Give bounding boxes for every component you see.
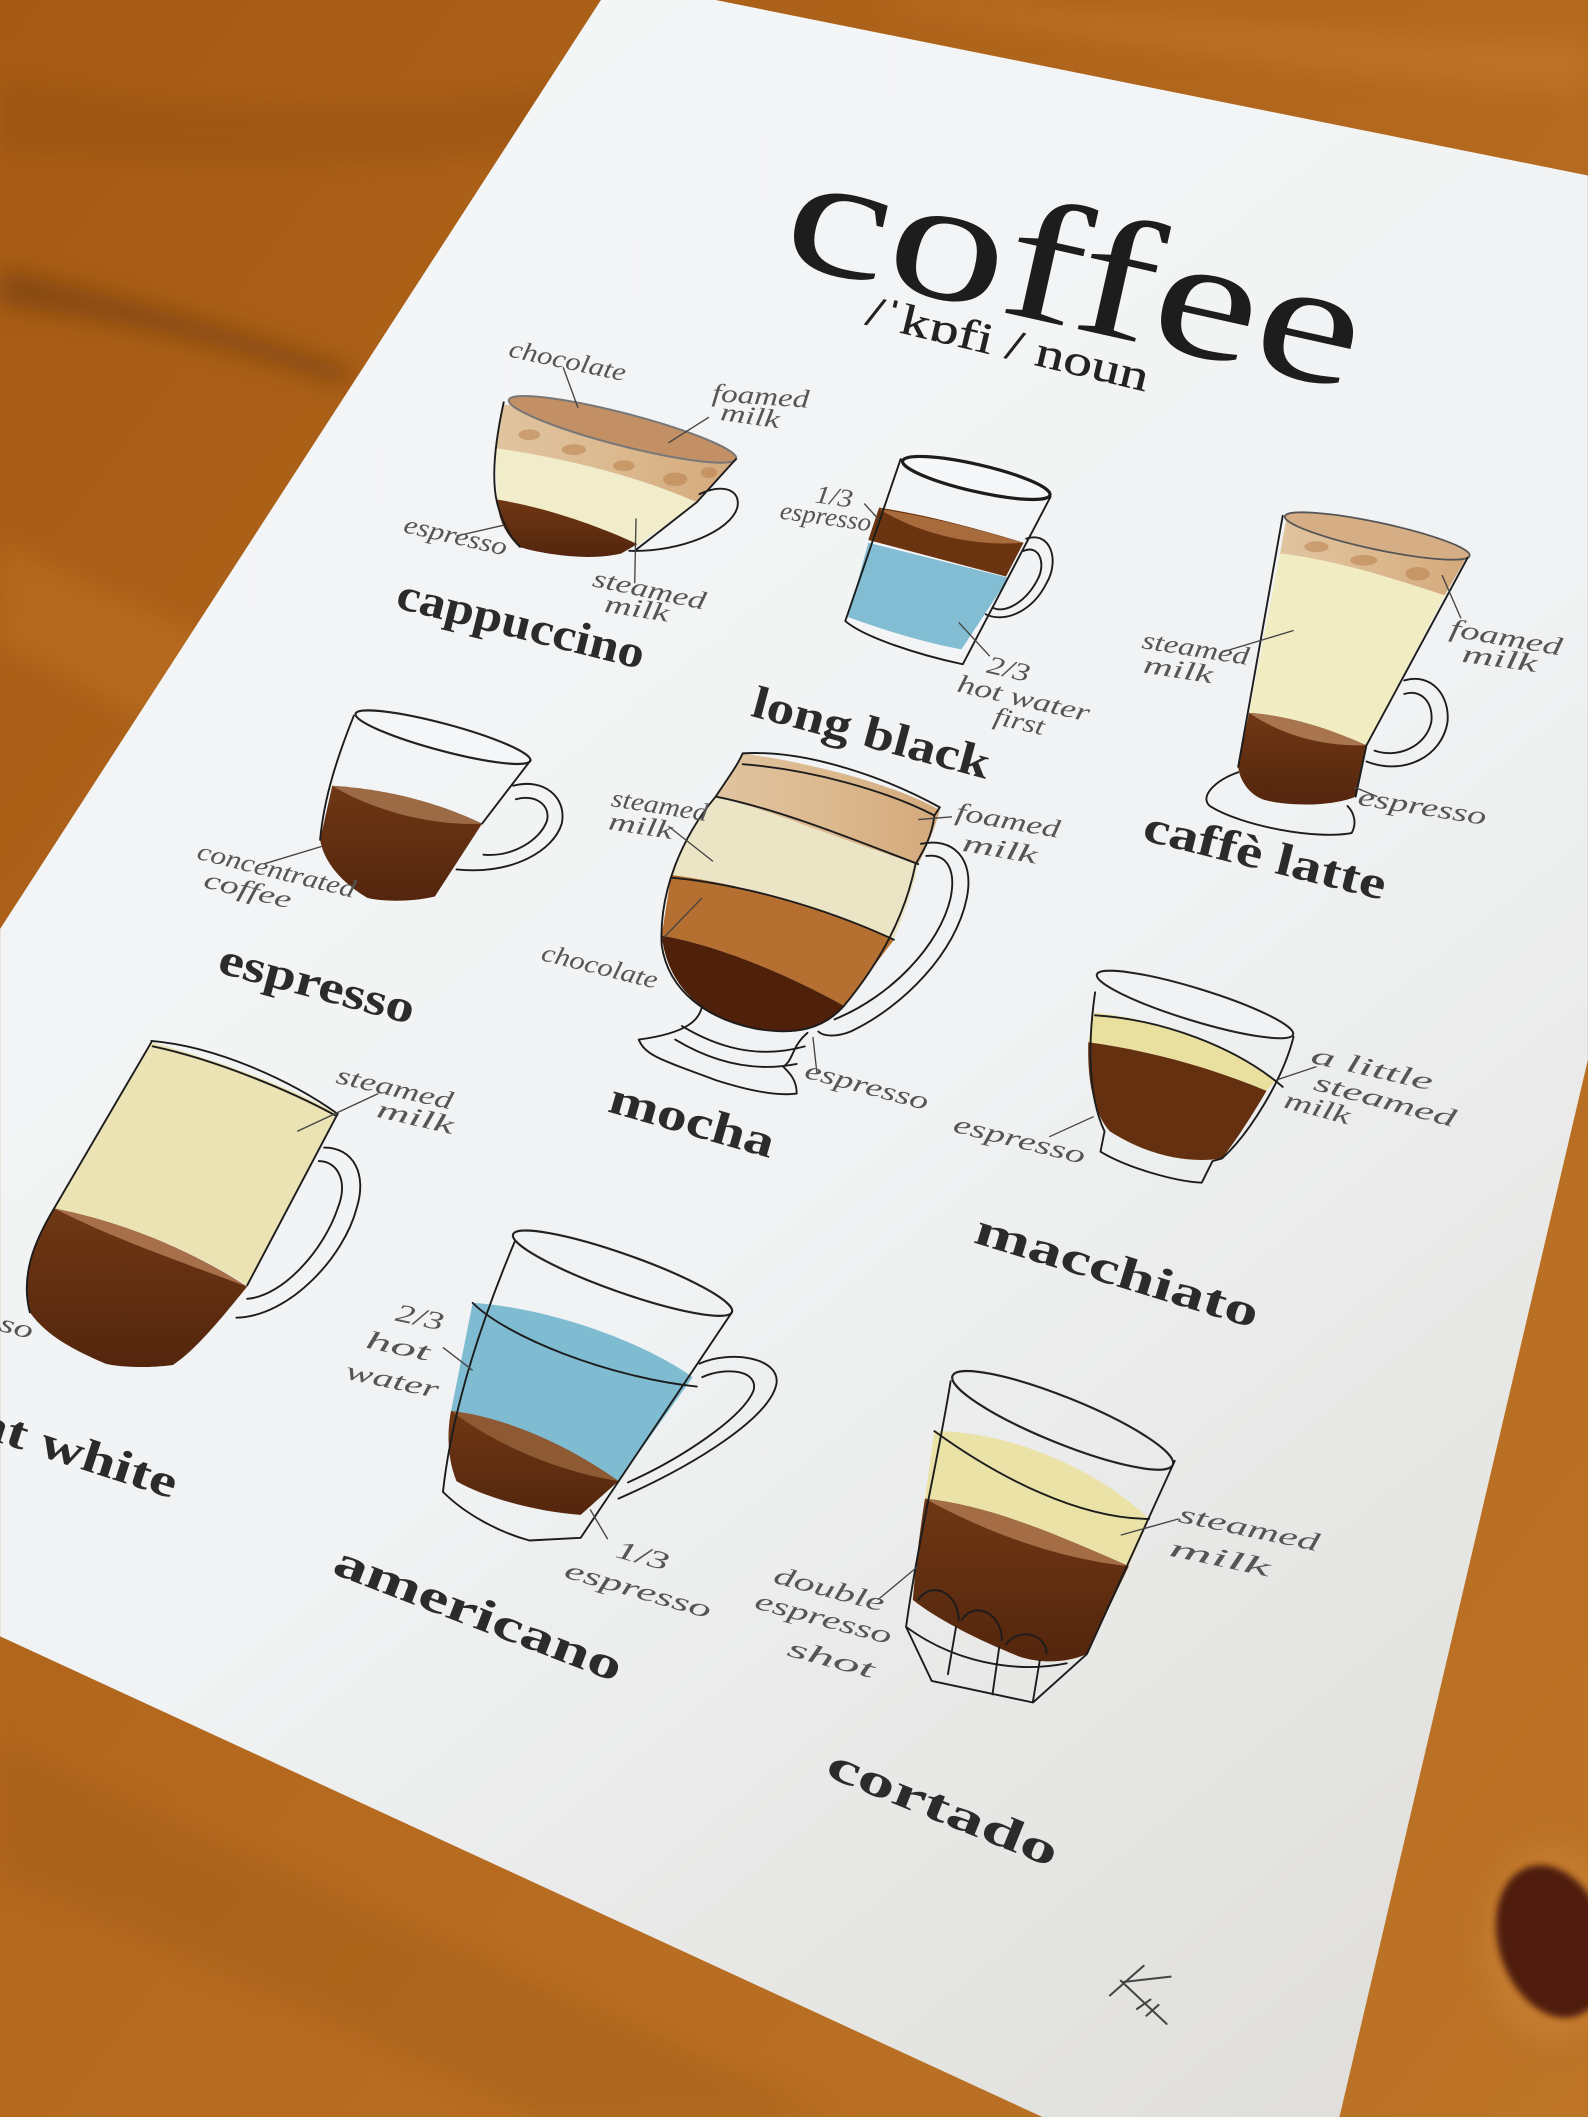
- label: double espresso shot: double: [771, 1560, 888, 1617]
- label: concentrated coffee: [194, 836, 359, 914]
- glass outline and foot: [1090, 992, 1294, 1183]
- label: steamed milk: [334, 1060, 458, 1140]
- label: a little steamed milk: a little: [1308, 1040, 1436, 1096]
- coffee layer: [320, 786, 482, 901]
- mug foot: [639, 1006, 808, 1094]
- espresso layer: [913, 1499, 1129, 1661]
- label: espresso: espresso: [802, 1055, 932, 1116]
- label: steamed milk: [590, 563, 709, 628]
- label: one third espresso: [778, 479, 873, 537]
- name: cortado: [820, 1737, 1067, 1877]
- espresso layer: [1088, 1042, 1267, 1160]
- label: steamed milk: milk: [607, 806, 676, 845]
- label: one third espresso: 1/3: [813, 479, 855, 513]
- label: foamed milk: milk: [719, 397, 783, 434]
- drink: espresso: [194, 701, 563, 1034]
- label: steamed milk: milk: [1167, 1533, 1275, 1583]
- foam speckles: [1304, 541, 1430, 581]
- leader lines: [1049, 1067, 1316, 1137]
- espresso layer: [662, 936, 844, 1031]
- label: two thirds hot water first: 2/3: [984, 650, 1033, 688]
- label: steamed milk: milk: [1141, 650, 1216, 689]
- label: espresso: espresso: [1356, 782, 1489, 831]
- cup handle and outline: [494, 402, 738, 551]
- glass outline and facets: [906, 1381, 1175, 1703]
- hot water layer: [848, 543, 1009, 649]
- name: macchiato: [969, 1203, 1266, 1338]
- label: one third espresso: 1/3: [613, 1534, 673, 1576]
- drink: cortado: [752, 1355, 1322, 1877]
- label: steamed milk: steamed: [590, 563, 709, 616]
- label: foamed milk: [711, 378, 810, 434]
- espresso layer: [497, 500, 637, 557]
- label: foamed milk: foamed: [1448, 613, 1565, 662]
- espresso layer: [1238, 713, 1366, 805]
- title: coffee: [770, 113, 1383, 427]
- espresso layer: [448, 1411, 618, 1515]
- name: mocha: [604, 1072, 781, 1168]
- leader line: [263, 847, 321, 864]
- drink: macchiato: [951, 959, 1460, 1338]
- label: steamed milk: [1167, 1499, 1322, 1583]
- leader lines: [1222, 575, 1461, 797]
- label: foamed milk: foamed: [711, 378, 810, 414]
- label: two thirds hot water: water: [343, 1356, 443, 1404]
- label: steamed milk: milk: [603, 589, 672, 628]
- label: steamed milk: steamed: [1176, 1499, 1322, 1557]
- label: double espresso shot: [752, 1560, 895, 1685]
- label: steamed milk: milk: [374, 1094, 458, 1140]
- drink: mocha: [539, 753, 1063, 1168]
- label: steamed milk: steamed: [1140, 625, 1251, 671]
- label: a little steamed milk: milk: [1281, 1085, 1355, 1131]
- chocolate layer: [662, 875, 894, 1006]
- glass rim: [1092, 959, 1298, 1050]
- name: long black: [747, 676, 997, 789]
- pronunciation: /ˈkɒfi / noun: [862, 288, 1154, 401]
- leader lines: [878, 1519, 1179, 1600]
- mug handle: [818, 843, 968, 1036]
- steamed milk layer: [54, 1042, 338, 1285]
- mug outline: [661, 753, 940, 1031]
- steamed milk layer: [925, 1431, 1149, 1566]
- foam layer: [496, 404, 736, 502]
- foam layer: [716, 753, 940, 864]
- drink: flat white: [0, 1041, 458, 1508]
- label: double espresso shot: espresso: [752, 1586, 895, 1650]
- drink: long black: [747, 448, 1094, 789]
- label: concentrated coffee: coffee: [201, 865, 295, 914]
- name: espresso: [214, 932, 421, 1034]
- artist signature: [1110, 1966, 1171, 2024]
- label: steamed milk: [1140, 625, 1251, 689]
- label: concentrated coffee: concentrated: [194, 836, 359, 904]
- steamed milk layer: [1249, 554, 1445, 745]
- label: a little steamed milk: [1281, 1040, 1460, 1133]
- label: steamed milk: steamed: [334, 1060, 456, 1115]
- glass outline and handle: [845, 459, 1053, 664]
- leader lines: [297, 1094, 378, 1131]
- name: cappuccino: [392, 568, 651, 679]
- name: americano: [327, 1535, 630, 1692]
- leader lines: [663, 817, 952, 1073]
- leader lines: [443, 1347, 608, 1539]
- steamed milk layer: [1088, 1013, 1276, 1091]
- glass rim: [944, 1355, 1181, 1486]
- drink: americano: [327, 1217, 777, 1692]
- label: chocolate: chocolate: [507, 334, 629, 387]
- label: one third espresso: espresso: [561, 1555, 715, 1624]
- leader lines: [864, 504, 990, 656]
- label: foamed milk: milk: [960, 828, 1041, 870]
- name: caffè latte: [1139, 800, 1392, 910]
- cup outline and handle: [320, 716, 563, 870]
- foam speckles: [519, 429, 717, 486]
- label: foamed milk: [954, 797, 1063, 870]
- glass body: [848, 460, 1051, 664]
- glass outline, handle and saucer: [1206, 516, 1468, 835]
- label: two thirds hot water first: first: [991, 701, 1049, 741]
- glass rim: [507, 1217, 738, 1330]
- steamed milk layer: [671, 797, 918, 945]
- cup rim: [505, 384, 740, 474]
- label: steamed milk: steamed: [609, 783, 710, 827]
- leader lines: [456, 367, 709, 583]
- steamed milk layer: [496, 448, 697, 545]
- drink: caffe latte: [1139, 503, 1565, 910]
- wood knot: [1477, 1847, 1588, 2041]
- label: one third espresso: espresso: [778, 496, 873, 537]
- glass rim: [1282, 503, 1473, 569]
- label: one third espresso: [561, 1534, 715, 1624]
- label: double espresso shot: shot: [784, 1633, 880, 1685]
- label: foamed milk: milk: [1460, 639, 1540, 678]
- label: chocolate: chocolate: [539, 938, 661, 995]
- cup outline and handle: [27, 1042, 360, 1318]
- label: espresso: espresso: [951, 1109, 1089, 1170]
- label: a little steamed milk: steamed: [1311, 1067, 1460, 1133]
- label: steamed milk: [607, 783, 710, 845]
- hot water layer: [451, 1303, 693, 1481]
- label: foamed milk: foamed: [954, 797, 1063, 844]
- espresso layer: [868, 508, 1024, 577]
- label: foamed milk: [1448, 613, 1565, 678]
- foam layer: [1280, 516, 1466, 595]
- espresso layer: [27, 1208, 247, 1367]
- cup rim: [352, 701, 534, 774]
- label: two thirds hot water: hot: [363, 1325, 435, 1367]
- label: two thirds hot water: [343, 1298, 447, 1404]
- label: espresso: espresso: [401, 510, 510, 562]
- cup rim: [151, 1041, 338, 1115]
- label: two thirds hot water: 2/3: [393, 1298, 447, 1336]
- glass rim: [900, 448, 1053, 508]
- drink: cappuccino: [392, 334, 810, 679]
- glass outline and handle: [443, 1242, 777, 1540]
- label: two thirds hot water first: hot water: [955, 669, 1094, 728]
- label: two thirds hot water first: [955, 650, 1094, 741]
